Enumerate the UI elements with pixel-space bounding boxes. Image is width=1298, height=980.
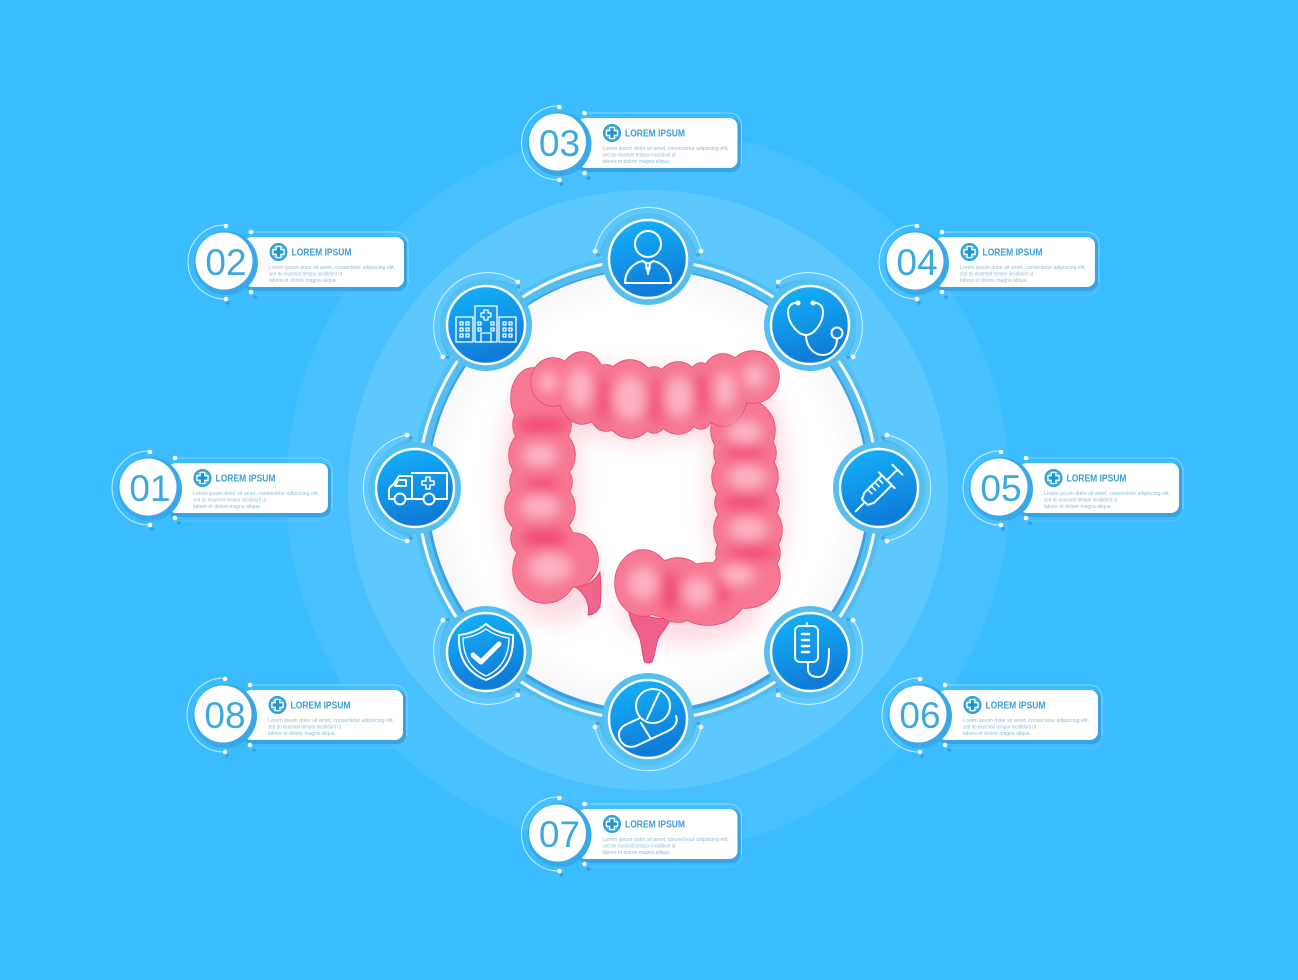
body text 06: labore et dolore magna aliqua. <box>963 731 1031 737</box>
rectum <box>628 608 671 663</box>
heading 01: LOREM IPSUM <box>216 474 276 484</box>
body text 06 <box>963 718 1089 737</box>
icon: ambulance <box>389 473 447 504</box>
heading 07: LOREM IPSUM <box>625 820 685 830</box>
heading 08: LOREM IPSUM <box>290 700 350 712</box>
body text 01: Lorem ipsum dolor sit amet, consectetur adipiscing elit, <box>193 491 319 497</box>
body text 04 <box>960 265 1086 284</box>
body text 03: labore et dolore magna aliqua. <box>602 159 671 165</box>
body text 08: labore et dolore magna aliqua. <box>268 731 336 737</box>
icon: doctor <box>625 231 671 283</box>
heading 04: LOREM IPSUM <box>982 248 1042 258</box>
node: hospital <box>410 249 532 371</box>
node: pills <box>593 673 703 771</box>
colon shading <box>516 363 778 614</box>
node: ambulance <box>363 433 461 543</box>
body text 07: sed do eiusmod tempor incididunt ut <box>602 844 676 850</box>
colon lower body <box>505 368 782 625</box>
colon upper fill <box>531 351 779 438</box>
body text 05 <box>1044 491 1170 510</box>
body text 04: Lorem ipsum dolor sit amet, consectetur adipiscing elit, <box>960 265 1086 271</box>
number 06: 06 <box>899 695 941 736</box>
card 01 <box>112 450 332 531</box>
colon illustration <box>500 351 787 663</box>
number 04: 04 <box>896 242 938 283</box>
body text 02: sed do eiusmod tempor incididunt ut <box>269 272 342 278</box>
colon glow shadow <box>500 367 787 644</box>
outer halo ring <box>286 128 1010 852</box>
number 07: 07 <box>539 814 580 855</box>
heading 02: LOREM IPSUM <box>292 248 352 258</box>
node: stethoscope <box>764 249 886 371</box>
node: syringe <box>833 433 931 543</box>
icon: syringe <box>848 462 905 519</box>
number 01: 01 <box>129 468 171 509</box>
number 08: 08 <box>204 695 246 736</box>
body text 06: Lorem ipsum dolor sit amet, consectetur adipiscing elit, <box>963 718 1089 724</box>
body text 07 <box>602 837 729 856</box>
icon: hospital <box>456 306 516 342</box>
colon lower fill <box>505 368 782 625</box>
icon: stethoscope <box>788 302 842 355</box>
card 07 <box>522 796 742 877</box>
body text 08 <box>268 718 394 737</box>
body text 08: sed do eiusmod tempor incididunt ut <box>268 724 341 730</box>
card 03 <box>522 105 742 186</box>
body text 06: sed do eiusmod tempor incididunt ut <box>963 724 1036 730</box>
body text 02 <box>269 265 395 284</box>
central white disc <box>412 254 884 726</box>
body text 05: labore et dolore magna aliqua. <box>1044 504 1112 510</box>
node: doctor <box>593 207 703 305</box>
colon upper body <box>531 351 779 438</box>
heading 06: LOREM IPSUM <box>986 700 1046 712</box>
body text 03: sed do eiusmod tempor incididunt ut <box>602 152 676 158</box>
body text 03: Lorem ipsum dolor sit amet, consectetur adipiscing elit, <box>602 146 729 152</box>
number 02: 02 <box>205 242 247 283</box>
body text 04: labore et dolore magna aliqua. <box>960 278 1028 284</box>
card 06 <box>882 677 1102 758</box>
number 05: 05 <box>980 468 1022 509</box>
icon: IV bag <box>795 623 829 677</box>
appendix <box>574 572 601 615</box>
card 04 <box>879 224 1099 305</box>
body text 01: labore et dolore magna aliqua. <box>193 504 261 510</box>
node: shield <box>410 606 532 728</box>
icon: pills <box>619 689 677 747</box>
icon: shield check <box>459 624 513 680</box>
card 05 <box>963 450 1183 531</box>
heading 03: LOREM IPSUM <box>625 128 685 140</box>
card 02 <box>188 224 408 305</box>
body text 02: Lorem ipsum dolor sit amet, consectetur adipiscing elit, <box>269 265 395 271</box>
body text 08: Lorem ipsum dolor sit amet, consectetur adipiscing elit, <box>268 718 394 724</box>
heading 05: LOREM IPSUM <box>1066 474 1126 484</box>
body text 07: labore et dolore magna aliqua. <box>602 850 671 856</box>
number 03: 03 <box>539 123 580 164</box>
body text 03 <box>602 146 729 165</box>
colon creases <box>516 372 778 614</box>
body text 05: sed do eiusmod tempor incididunt ut <box>1044 498 1117 504</box>
node: IV bag <box>764 606 886 728</box>
card 08 <box>187 677 407 758</box>
body text 01 <box>193 491 319 510</box>
body text 05: Lorem ipsum dolor sit amet, consectetur adipiscing elit, <box>1044 491 1170 497</box>
body text 04: sed do eiusmod tempor incididunt ut <box>960 272 1033 278</box>
body text 01: sed do eiusmod tempor incididunt ut <box>193 498 266 504</box>
body text 07: Lorem ipsum dolor sit amet, consectetur adipiscing elit, <box>602 837 729 843</box>
body text 02: labore et dolore magna aliqua. <box>269 278 337 284</box>
colon highlights <box>520 363 768 607</box>
inner halo ring <box>348 190 948 790</box>
